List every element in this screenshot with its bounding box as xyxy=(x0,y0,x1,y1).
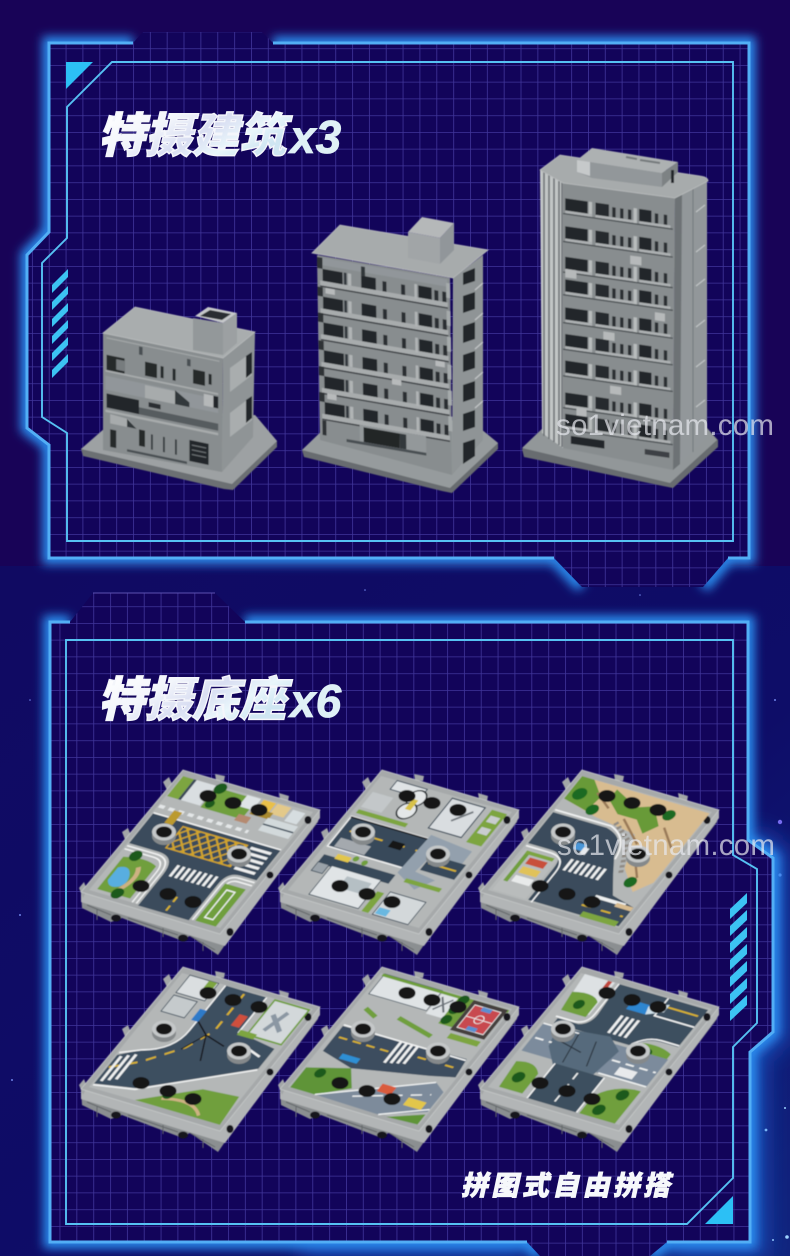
base plate xyxy=(81,415,277,490)
panel: bases xyxy=(40,590,780,1256)
side stripes xyxy=(730,893,747,1021)
outer glow xyxy=(27,43,749,587)
ribbed wall xyxy=(540,170,563,448)
inner border xyxy=(66,640,757,1224)
outer border xyxy=(50,622,773,1242)
side stripes xyxy=(52,269,68,378)
front wall with windows xyxy=(317,255,453,475)
base plate xyxy=(302,420,498,493)
heading: buildings: 特摄建筑 xyxy=(95,111,296,163)
board 5: highway and court xyxy=(278,967,519,1152)
heading: bases: x6 xyxy=(287,675,342,727)
board 3: cliff and road xyxy=(478,770,719,955)
board 4: cracked junction xyxy=(79,967,320,1152)
front wall xyxy=(103,333,223,472)
outer border xyxy=(27,43,749,558)
right wall xyxy=(452,255,483,475)
roof xyxy=(103,307,255,358)
front wall with windows xyxy=(563,182,675,470)
building: tall xyxy=(522,148,718,488)
chimney xyxy=(193,307,237,355)
board 2: facility roads xyxy=(278,770,519,955)
building: small xyxy=(81,307,277,490)
heading: buildings: x3 xyxy=(287,111,342,163)
roof xyxy=(540,155,708,198)
inner border xyxy=(42,62,733,541)
base plate xyxy=(522,420,718,488)
roof xyxy=(312,225,488,278)
notch top edge xyxy=(93,592,215,594)
watermark bottom: so1vietnam.com xyxy=(557,829,775,862)
right wall xyxy=(673,178,707,470)
panel: buildings xyxy=(20,30,760,590)
board 6: broken highway xyxy=(478,967,719,1152)
caption: 拼图式自由拼搭 xyxy=(460,1170,679,1201)
right wall xyxy=(222,332,255,472)
panel fill and grid xyxy=(40,590,780,1256)
corner triangle xyxy=(705,1196,733,1224)
corner triangle xyxy=(66,62,93,89)
panel fill and grid xyxy=(20,30,760,590)
wide outer glow xyxy=(300,840,773,1242)
board 1: intersection with park xyxy=(79,770,320,955)
heading: bases: 特摄底座 xyxy=(95,675,296,727)
background: upper section xyxy=(0,0,790,566)
watermark top: so1vietnam.com xyxy=(556,409,774,442)
building: medium xyxy=(302,217,498,493)
background: lower starry section xyxy=(0,566,790,1256)
rooftop box xyxy=(408,217,454,264)
outer glow xyxy=(50,622,773,1256)
rooftop unit xyxy=(577,148,678,187)
